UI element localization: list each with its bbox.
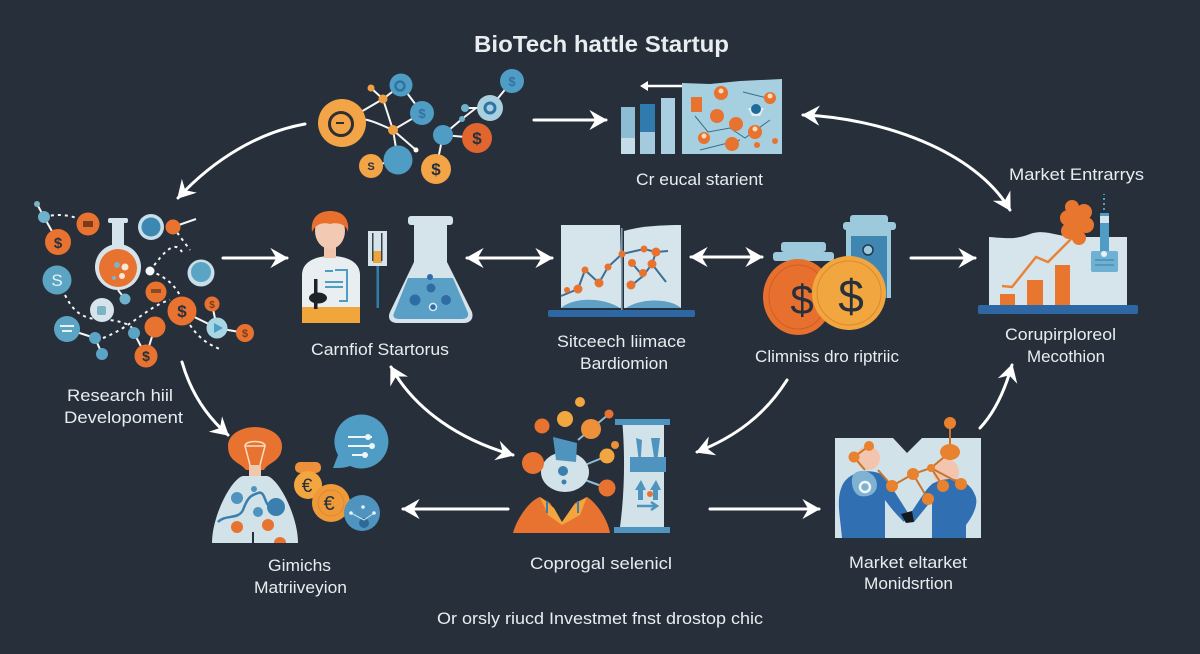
brain <box>1060 200 1094 245</box>
arrow: research to bulb <box>182 362 228 435</box>
label: market chart: Mecothion <box>1027 347 1105 366</box>
label: bulb: Gimichs <box>268 556 331 575</box>
arrow: scroll to handshake <box>710 508 819 510</box>
icon: funding network top: $ <box>472 129 482 148</box>
icon: research network left: S <box>51 271 63 290</box>
icon: graduate head with nodes <box>513 397 619 533</box>
icon: scroll with arrows <box>614 419 670 533</box>
label: research development <box>64 386 183 427</box>
icon: research network left: $ <box>142 348 150 364</box>
yellow coin: $ <box>838 270 864 322</box>
speech bubble <box>333 415 388 469</box>
label: market chart: Corupirploreol <box>1005 325 1116 344</box>
big orange coin <box>318 99 366 147</box>
arrow: handshake to market <box>980 365 1012 428</box>
arrow: book to coins <box>691 256 762 258</box>
label: book: Bardiomion <box>580 354 668 373</box>
icon: funding network top: $ <box>418 106 426 121</box>
icon: research network left: $ <box>242 328 248 340</box>
label: research development: Developoment <box>64 408 183 427</box>
arrow: flask to book <box>467 256 552 260</box>
arrow: research to scientist <box>223 256 287 260</box>
icon: scientist and flask <box>302 211 473 323</box>
title: BioTech hattle Startup <box>474 31 729 57</box>
icon: euro coins and speech bubble: € <box>323 493 335 515</box>
flask <box>95 218 141 290</box>
label: graduate: Coprogal selenicl <box>530 554 672 573</box>
footer caption: Or orsly riucd Investmet fnst drostop chic <box>437 609 764 628</box>
label: book <box>557 332 686 373</box>
icon: research network left <box>34 201 254 368</box>
arrow: coins to scroll <box>697 380 787 452</box>
icon: funding network top: S <box>367 161 375 173</box>
arrow: network to research <box>178 124 305 198</box>
icon: funding network top: $ <box>431 160 441 179</box>
conical flask <box>389 216 473 323</box>
icon: research network left: $ <box>54 235 63 252</box>
label: research development: Research hiil <box>67 386 173 405</box>
label: coins: Climniss dro riptriic <box>755 347 899 366</box>
icon: research network left: $ <box>177 302 187 321</box>
orange coin: $ <box>790 276 814 323</box>
arrow: coins to market chart <box>911 256 975 260</box>
arrow: graduate to euro coins <box>403 508 508 510</box>
scientist <box>302 211 387 323</box>
label: handshake: Monidsrtion <box>864 574 953 593</box>
icon: funding network top: $ <box>508 74 516 89</box>
icon: coins and jars <box>763 215 896 335</box>
label: bulb: Matriiveyion <box>254 578 347 597</box>
icon: crucial chart and map top <box>621 79 782 154</box>
label: bulb <box>254 556 347 597</box>
label: market entry: Market Entrarrys <box>1009 165 1144 184</box>
icon: handshake with network <box>835 417 981 538</box>
icon: market chart with brain <box>978 194 1138 314</box>
label: book: Sitceech liimace <box>557 332 686 351</box>
label: crucial: Cr eucal starient <box>636 170 763 189</box>
icon: research network left: $ <box>209 300 215 311</box>
arrow: scientist to graduate <box>391 367 513 455</box>
arrow: chart to market entry <box>803 115 1010 210</box>
icon: funding network top <box>318 69 524 184</box>
icon: euro coins and speech bubble <box>294 415 388 531</box>
label: startups: Carnfiof Startorus <box>311 340 449 359</box>
label: market chart <box>1005 325 1116 366</box>
icon: open book with graph <box>548 225 695 317</box>
label: handshake <box>849 553 967 593</box>
arrow: network to chart <box>534 118 606 122</box>
label: handshake: Market eltarket <box>849 553 967 572</box>
icon: light bulb flask <box>212 427 298 543</box>
icon: euro coins and speech bubble: € <box>302 476 313 497</box>
